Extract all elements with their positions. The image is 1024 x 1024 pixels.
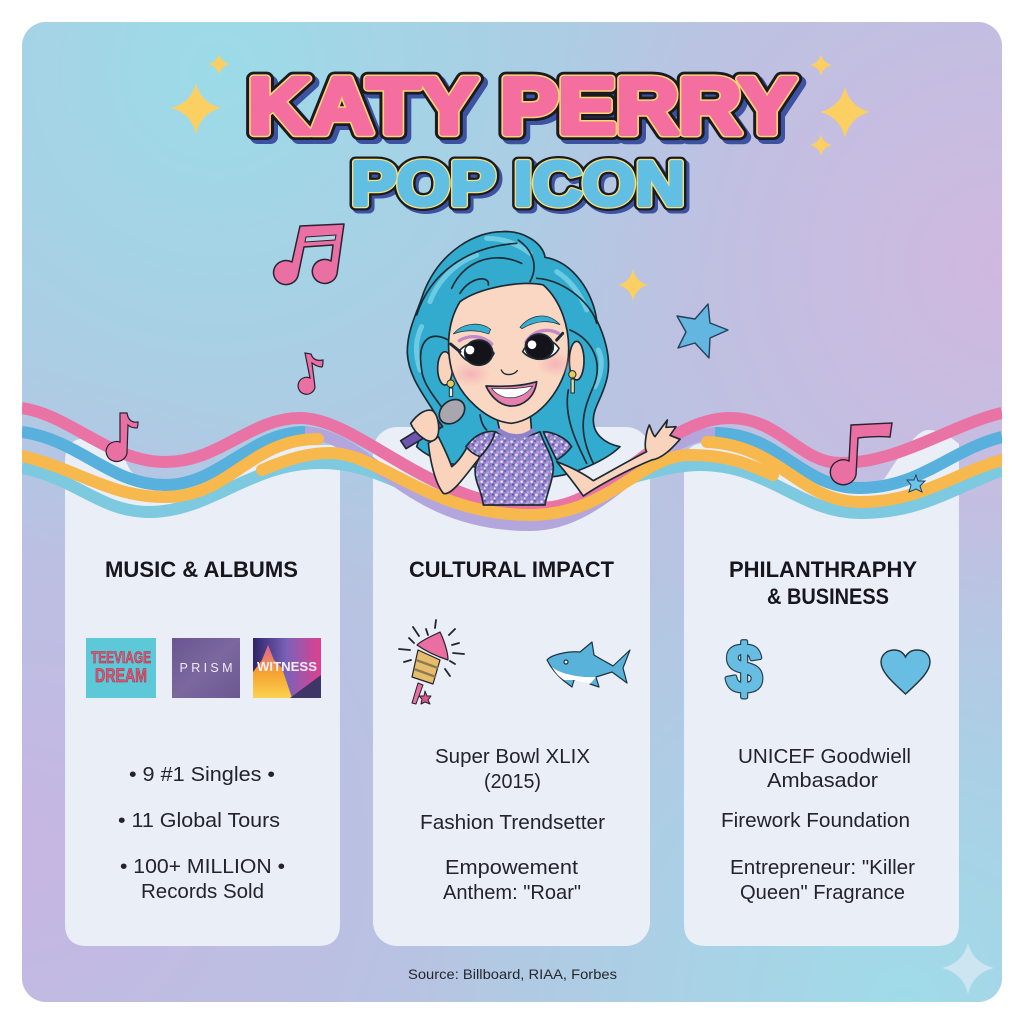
list: cultural facts: Empowement [445, 857, 578, 879]
list: cultural facts: (2015) [484, 771, 541, 793]
title: Katy Perry: KATY PERRY [252, 65, 800, 154]
heading: philanthropy and business: PHILANTHRAPHY [729, 557, 917, 582]
eyes [451, 333, 563, 365]
icon: blue star [677, 304, 728, 358]
album: Teenage Dream cover: TEEVIAGE [91, 648, 151, 667]
subtitle: Pop Icon: POP ICON [351, 150, 685, 219]
icon: left wave music note [106, 413, 138, 461]
rainbow waves [22, 408, 1002, 525]
icon: dollar sign: $ [726, 631, 762, 707]
list: philanthropy facts: Entrepreneur: "Killer [730, 857, 915, 879]
nose [501, 370, 517, 375]
list: philanthropy facts [721, 746, 915, 904]
right arm and hand [557, 420, 680, 496]
collar [499, 431, 533, 436]
eyebrows [453, 316, 560, 334]
icon: dollar sign: $ [726, 631, 762, 707]
list: philanthropy facts: UNICEF Goodwiell [738, 746, 911, 768]
neck [497, 412, 532, 435]
mouth [486, 382, 537, 406]
source note: Source: Billboard, RIAA, Forbes [408, 966, 617, 982]
icon: small yellow sparkle [618, 269, 648, 301]
list: cultural facts: Anthem: "Roar" [443, 882, 581, 904]
icon: heart [881, 650, 930, 694]
earrings [447, 371, 576, 397]
album: Teenage Dream cover [86, 638, 156, 698]
album: Prism cover [172, 638, 240, 698]
list: philanthropy facts: Ambasador [767, 770, 878, 792]
list: music facts: • 9 #1 Singles • [129, 764, 275, 786]
album: Witness cover: WITNESS [257, 660, 317, 674]
right sleeve [543, 432, 572, 460]
title: Katy Perry: KATY PERRY [248, 61, 796, 150]
subtitle: Pop Icon: POP ICON [351, 150, 685, 219]
icon: title sparkles [171, 54, 870, 156]
list: philanthropy facts: Queen" Fragrance [740, 882, 905, 904]
ears [438, 352, 452, 385]
back hair [407, 232, 620, 477]
subtitle: Pop Icon: POP ICON [351, 150, 685, 219]
list: philanthropy facts: Firework Foundation [721, 810, 910, 832]
title: Katy Perry: KATY PERRY [248, 61, 796, 150]
gripping hand [411, 410, 439, 441]
eye shadow [459, 330, 558, 344]
icon: small music note [298, 353, 323, 394]
album: Prism cover: PRISM [180, 661, 232, 675]
icon: right wave music note [830, 423, 892, 485]
face [449, 283, 569, 423]
list: music facts: • 11 Global Tours [118, 810, 280, 832]
list: cultural facts: Super Bowl XLIX [435, 746, 590, 768]
list: cultural facts [420, 746, 605, 904]
panel: philanthropy and business card [684, 430, 959, 946]
album: Witness cover [253, 638, 321, 698]
icon: beamed music note [274, 224, 344, 285]
heading: philanthropy and business: & BUSINESS [767, 584, 889, 609]
title: Katy Perry: KATY PERRY [248, 61, 796, 150]
hair strands [417, 240, 597, 463]
list: music facts: Records Sold [141, 881, 264, 903]
heading: cultural impact: CULTURAL IMPACT [409, 557, 615, 582]
dress [475, 432, 553, 505]
icon: firework rocket [399, 620, 464, 704]
subtitle: Pop Icon: POP ICON [354, 153, 688, 222]
list: cultural facts: Fashion Trendsetter [420, 812, 605, 834]
list: music facts [118, 764, 285, 903]
icon: corner sparkle [942, 943, 994, 994]
icon: small star on wave [907, 475, 925, 492]
microphone head [434, 394, 470, 429]
left sleeve [466, 431, 495, 457]
left arm [428, 437, 480, 494]
panel: music and albums card [65, 432, 340, 946]
microphone handle [401, 418, 443, 449]
panel: cultural impact card [373, 427, 650, 946]
hair highlights [416, 238, 601, 387]
character: singer with blue hair and microphone [401, 232, 680, 505]
list: music facts: • 100+ MILLION • [120, 856, 285, 878]
album: Teenage Dream cover: DREAM [95, 666, 147, 687]
blush [450, 351, 574, 387]
heading: philanthropy and business [729, 557, 917, 609]
icon: shark [547, 642, 630, 687]
heading: music and albums: MUSIC & ALBUMS [105, 557, 298, 582]
